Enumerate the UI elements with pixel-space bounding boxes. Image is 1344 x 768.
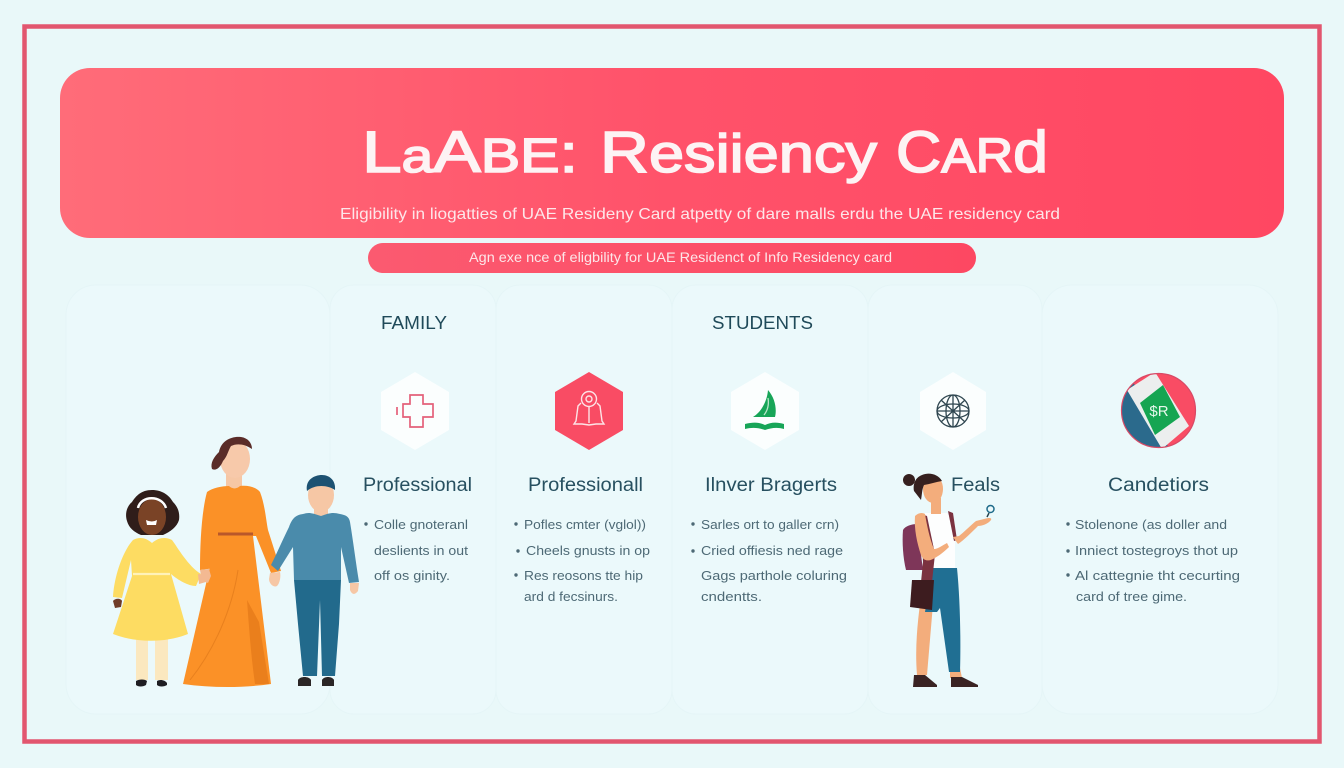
figure: girl in yellow dress [113,490,206,686]
column: inver bragerts: Cried offiesis ned rage [701,543,843,558]
illustration: student woman with backpack [903,474,994,687]
title: Resiiency [600,120,877,185]
icon: globe hexagon [920,372,986,450]
column: inver bragerts: Sarles ort to galler crn) [701,517,839,532]
white top [925,513,955,568]
column: inver bragerts [691,475,847,604]
icon: book hexagon [555,372,623,450]
title: CARd [896,120,1048,185]
trousers [925,568,960,672]
head [931,498,941,514]
icon: leaf and book hexagon [731,372,799,450]
column: professional: off os ginity. [374,568,450,583]
subtitle: Eligibility in liogatties of UAE Resideny Card atpetty of dare malls erdu the UAE residency card [340,206,1060,223]
figure: boy in blue sweater [271,475,359,686]
column: candetiors [1066,475,1240,604]
column: inver bragerts: Gags parthole coluring [701,568,847,583]
currency symbol: $R [1149,403,1169,420]
sub-banner pill: Agn exe nce of eligbility for UAE Residenct of Info Residency card [469,250,892,265]
far arm [953,518,991,544]
bare leg [916,604,933,675]
figure: woman in orange dress [183,437,281,687]
column: professional: deslients in out [374,543,468,558]
title [362,120,1048,185]
column: professionall: ard d fecsinurs. [524,589,618,604]
illustration: family [113,437,359,687]
heading: family: FAMILY [381,313,447,333]
column: professionall: Professionall [528,475,643,496]
strap and fringe [921,514,935,582]
column: feals: Feals [951,475,1000,496]
shoes [913,675,937,687]
column: professional [363,475,472,583]
column: candetiors: Al cattegnie tht cecurting [1075,568,1240,583]
header banner [60,68,1284,238]
icon: currency round badge [1120,372,1198,450]
column: professionall: Cheels gnusts in op [526,543,650,558]
backpack [903,524,923,570]
column: inver bragerts: Ilnver Bragerts [705,475,837,496]
column: professionall: Res reosons tte hip [524,568,643,583]
column: candetiors: card of tree gime. [1076,589,1187,604]
column: candetiors: Candetiors [1108,475,1209,496]
title: LaABE : [362,120,578,185]
near arm [915,513,949,560]
sub-banner pill [368,243,976,273]
heading: students: STUDENTS [712,313,813,333]
column: professionall [514,475,650,604]
magnifier [987,506,994,512]
column: inver bragerts: cndentts. [701,589,762,604]
column: professional: Colle gnoteranl [374,517,468,532]
column: professional: Professional [363,475,472,496]
bag [910,580,934,610]
column: candetiors: Stolenone (as doller and [1075,517,1227,532]
column: professionall: Pofles cmter (vglol)) [524,517,646,532]
icon: medical cross hexagon [381,372,449,450]
column: candetiors: Inniect tostegroys thot up [1075,543,1238,558]
card panels [66,285,1278,714]
